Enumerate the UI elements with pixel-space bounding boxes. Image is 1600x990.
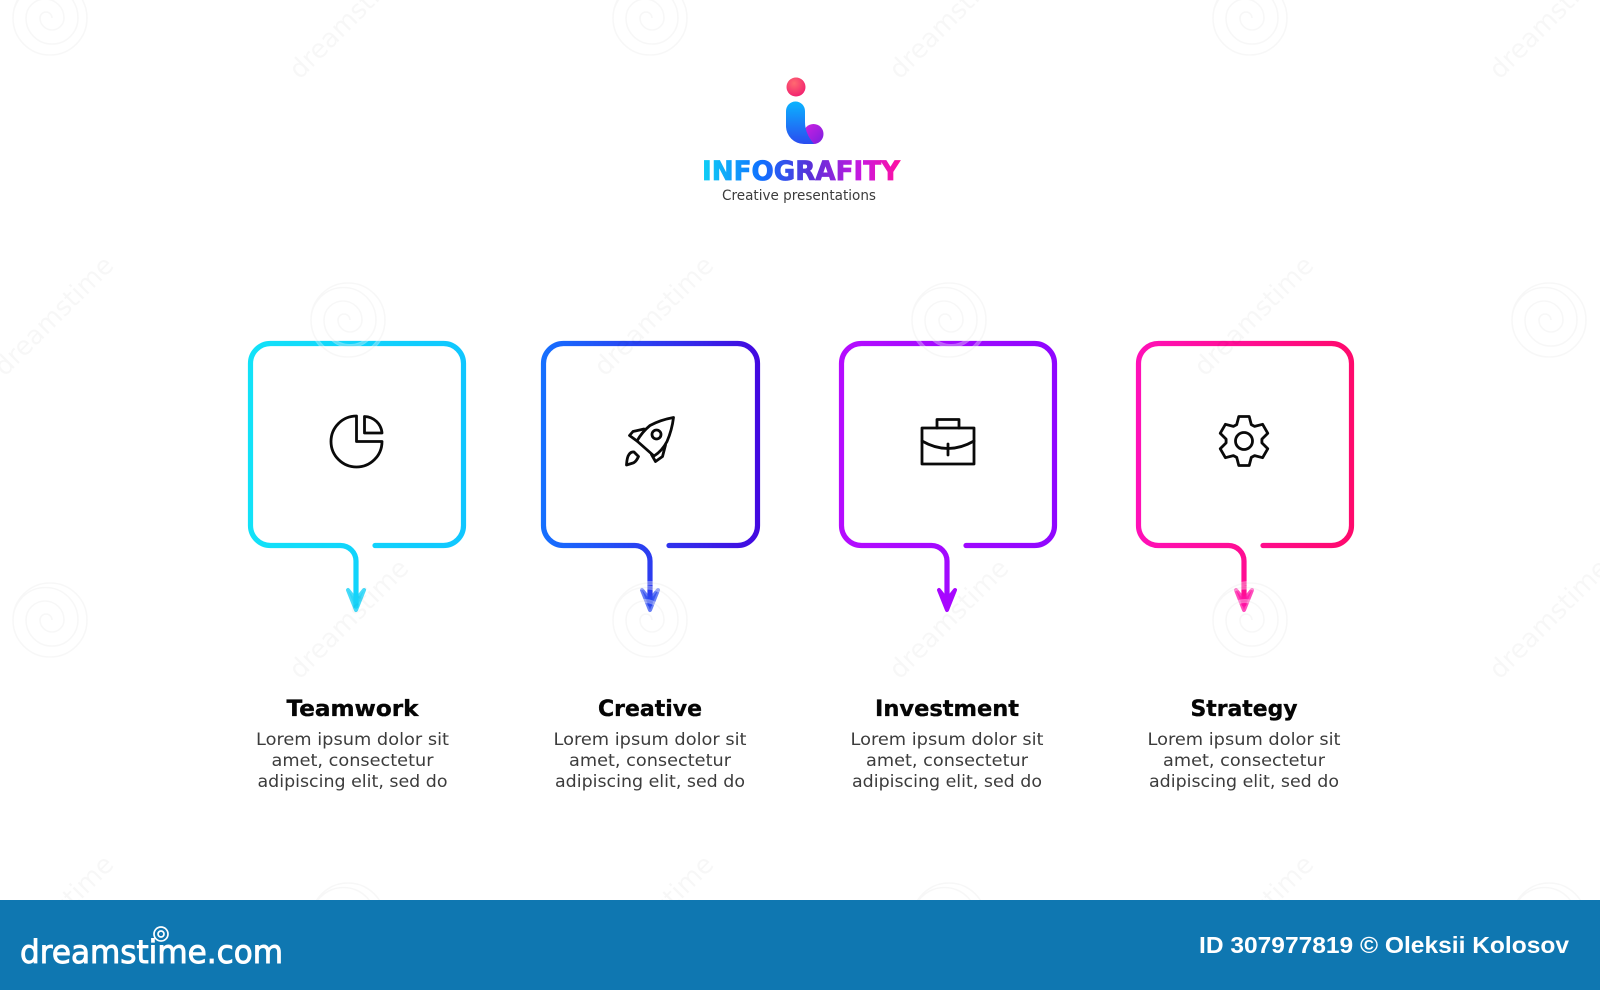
- panel: strategy: [1138, 344, 1352, 792]
- text block: Lorem ipsum dolor sit: [850, 730, 1044, 750]
- watermark overlay: dreamstime: [884, 554, 1015, 685]
- image id and author: ID 307977819 © Oleksii Kolosov: [1199, 932, 1569, 958]
- text block: amet, consectetur: [272, 751, 434, 771]
- panel: investment: [842, 344, 1054, 792]
- icon: pie chart: [331, 416, 382, 467]
- icon: briefcase: [922, 420, 974, 464]
- text block: adipiscing elit, sed do: [555, 772, 745, 792]
- heading: Investment: Investment: [875, 697, 1019, 722]
- text block: amet, consectetur: [866, 751, 1028, 771]
- watermark overlay: dreamstime: [589, 251, 720, 382]
- watermark overlay: dreamstime: [1189, 850, 1320, 981]
- icon: rocket: [626, 418, 674, 465]
- text block: [554, 730, 747, 792]
- text block: [256, 730, 449, 792]
- heading: Creative: Creative: [598, 697, 702, 722]
- footer logo text: dreamstime.com: [20, 933, 283, 971]
- watermark overlay: dreamstime: [1189, 251, 1320, 382]
- tagline: Creative presentations: [722, 188, 876, 204]
- watermark overlay: dreamstime: [589, 850, 720, 981]
- text block: Lorem ipsum dolor sit: [1148, 730, 1341, 750]
- brand name: INFOGRAFITY: [702, 156, 900, 187]
- text block: adipiscing elit, sed do: [852, 772, 1042, 792]
- text block: Lorem ipsum dolor sit: [554, 730, 747, 750]
- callout box with arrow: [842, 344, 1054, 610]
- panel: teamwork: [250, 344, 464, 792]
- text block: [1148, 730, 1341, 792]
- text block: amet, consectetur: [1163, 751, 1325, 771]
- text block: adipiscing elit, sed do: [1149, 772, 1339, 792]
- footer bar: [0, 900, 1600, 990]
- heading: Teamwork: Teamwork: [286, 697, 420, 722]
- panel: creative: [544, 344, 758, 792]
- logo mark: letter i: [786, 78, 824, 144]
- text block: amet, consectetur: [569, 751, 731, 771]
- logo: [702, 78, 900, 204]
- callout box with arrow: [544, 344, 758, 610]
- text block: adipiscing elit, sed do: [258, 772, 448, 792]
- text block: [850, 730, 1044, 792]
- callout box with arrow: [1138, 344, 1352, 610]
- heading: Strategy: Strategy: [1190, 697, 1298, 722]
- callout box with arrow: [250, 344, 464, 610]
- text block: Lorem ipsum dolor sit: [256, 730, 449, 750]
- watermark overlay: dreamstime: [284, 554, 415, 685]
- icon: gear: [1220, 416, 1268, 466]
- footer logo swirl: [154, 927, 168, 941]
